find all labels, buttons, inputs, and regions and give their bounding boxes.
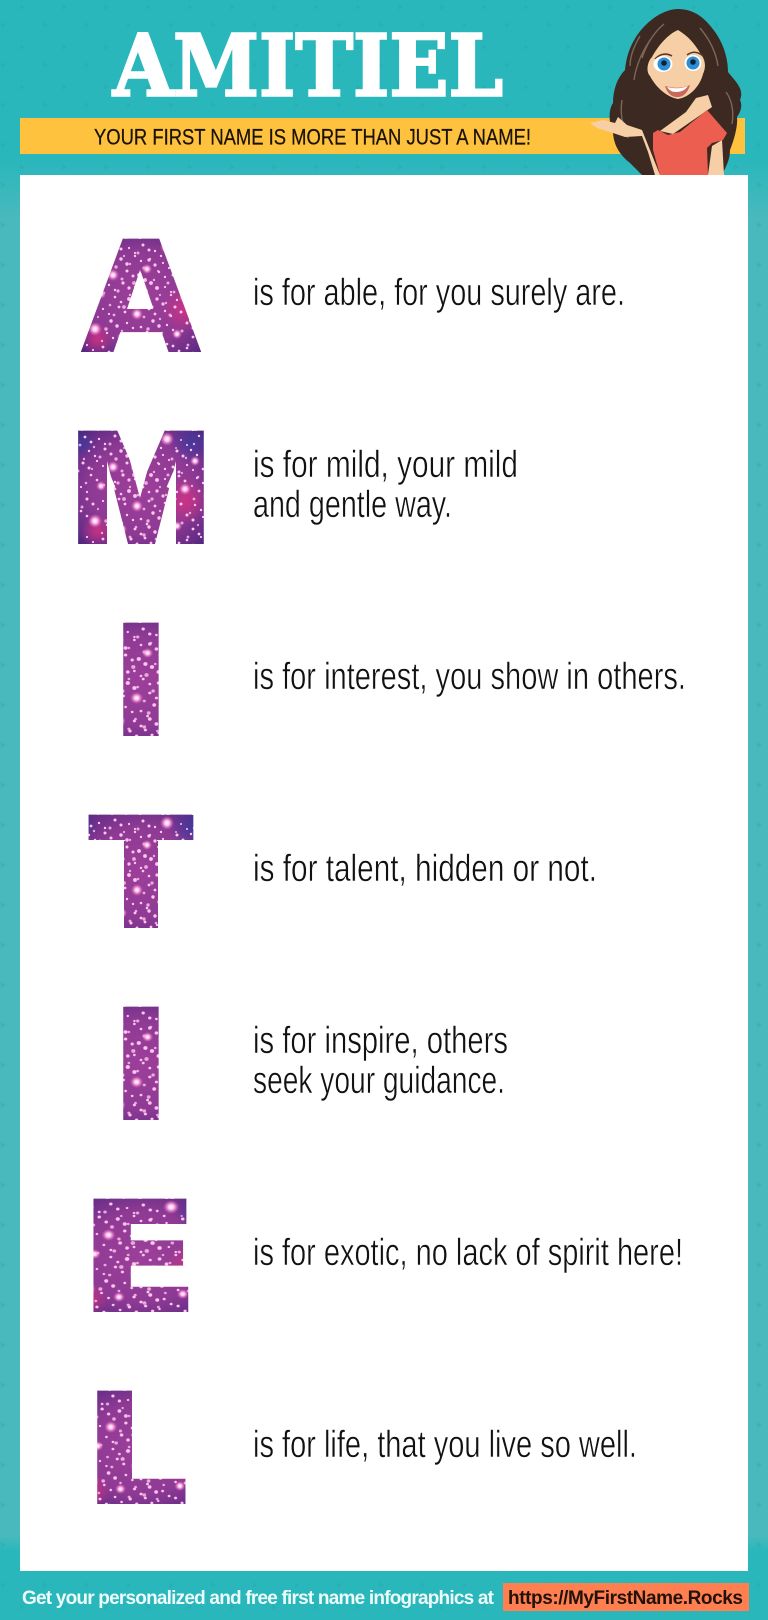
footer link badge: https://MyFirstName.Rocks bbox=[508, 1588, 743, 1609]
banner bbox=[20, 118, 745, 154]
letter I (second): I bbox=[110, 980, 172, 1154]
row text: M: is for mild, your mild bbox=[253, 444, 518, 486]
banner tagline: YOUR FIRST NAME IS MORE THAN JUST A NAME! bbox=[94, 124, 531, 150]
row text: I second bbox=[253, 1020, 508, 1102]
row text: I second: seek your guidance. bbox=[253, 1060, 505, 1102]
row text: M bbox=[253, 444, 518, 526]
letter A: A bbox=[83, 212, 199, 386]
letter T: T bbox=[90, 788, 192, 962]
letter L: L bbox=[85, 1363, 188, 1538]
row text: I second: is for inspire, others bbox=[253, 1020, 508, 1062]
footer tagline: Get your personalized and free first name infographics at bbox=[22, 1588, 495, 1609]
icon: cartoon woman bbox=[590, 9, 741, 175]
title: AMITIEL bbox=[112, 16, 503, 116]
letter M: M bbox=[66, 404, 216, 578]
letter E: E bbox=[80, 1171, 199, 1346]
letter I: I bbox=[110, 596, 172, 770]
row text: A: is for able, for you surely are. bbox=[253, 272, 625, 314]
row text: T: is for talent, hidden or not. bbox=[253, 848, 597, 890]
row text: L: is for life, that you live so well. bbox=[253, 1424, 637, 1466]
row text: M: and gentle way. bbox=[253, 484, 452, 526]
